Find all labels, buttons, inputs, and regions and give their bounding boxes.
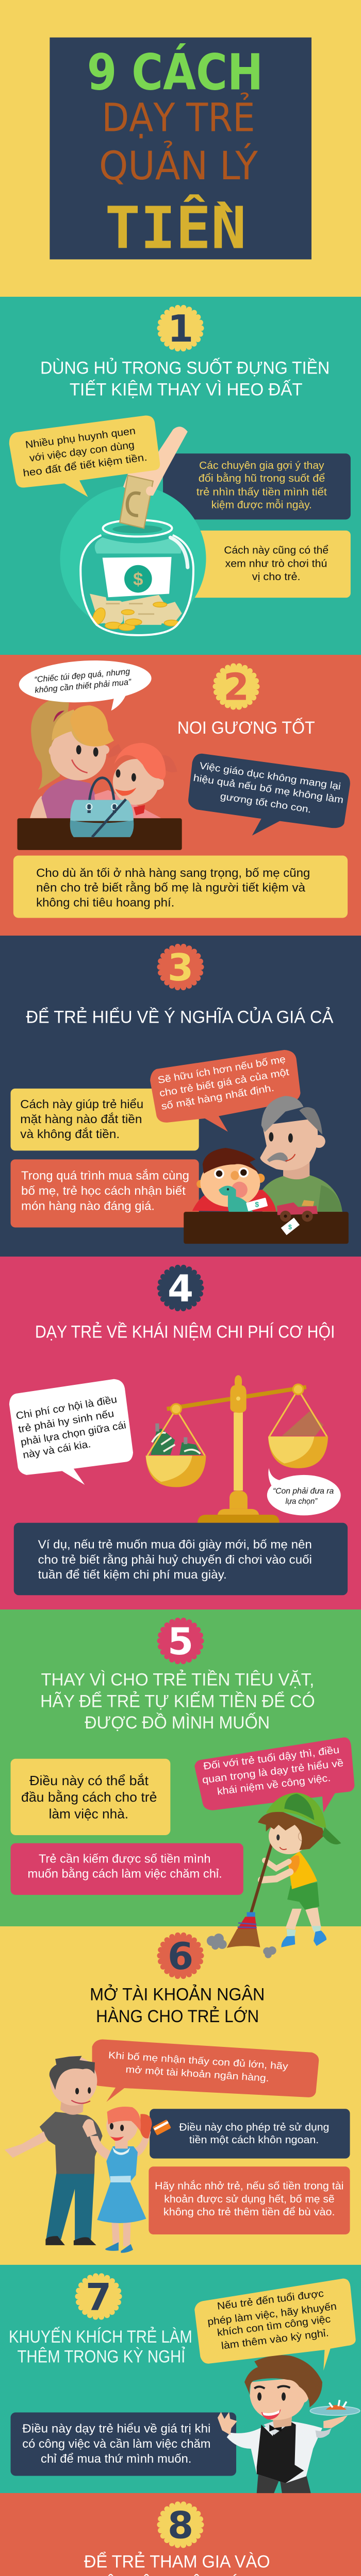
speech bubble: teens and work: Đối với trẻ tuổi dậy thì, điều [203,1744,340,1772]
number badge 2: 2 [223,666,249,709]
speech bubble: make a choice [267,1468,341,1515]
panel: work hard [11,1843,243,1895]
number badge 6: 6 [168,1935,193,1978]
heading 3: ĐỂ TRẺ HIỂU VỀ Ý NGHĨA CỦA GIÁ CẢ [26,1008,334,1027]
panel: housework: Điều này có thể bắt [29,1773,149,1788]
speech bubble: open account: Khi bố mẹ nhận thấy con đủ lớn, hãy [108,2049,289,2072]
number badge 7: 7 [86,2275,111,2318]
title line: dạy trẻ: DẠY TRẺ [102,92,255,141]
speech bubble: opportunity cost definition: này và cái kia. [22,1438,92,1461]
speech bubble: good example [188,754,350,836]
speech bubble: opportunity cost definition [9,1379,133,1485]
speech bubble: knowing prices: số mặt hàng nhất định. [160,1083,275,1112]
heading 6: MỞ TÀI KHOẢN NGÂN [90,1985,265,2004]
panel: shopping with parents [11,1159,199,1227]
illustration: waiter with tray [218,2355,360,2493]
illustration: grandfather and boy with toys: $ [288,1224,292,1231]
speech bubble: holiday job: khích con tìm công việc [217,2313,331,2338]
speech bubble: holiday job [194,2279,356,2370]
section 7 [9,2275,360,2493]
panel: work hard: Trẻ cần kiếm được số tiền mình [39,1852,210,1866]
panel: fun game [184,531,351,598]
panel: expensive items: và không đắt tiền. [20,1127,120,1141]
speech bubble: good example: Việc giáo dục không mang lại [199,760,341,792]
speech bubble: holiday job: Nếu trẻ đến tuổi được [217,2288,324,2312]
icon: jar with money [60,486,206,635]
panel: value of work [11,2412,236,2476]
speech bubble: teens and work: khái niệm về công việc. [217,1772,331,1798]
panel: housework [11,1759,170,1835]
speech bubble: opportunity cost definition: phải lựa chọn giữa cái [20,1419,127,1448]
section 6 [5,1935,350,2253]
panel: thrifty parents: Cho dù ăn tối ở nhà hàng sang trọng, bố mẹ cũng [36,866,310,879]
section 5 [11,1620,354,1958]
number badge 3: 3 [168,946,193,989]
heading 2: NOI GƯƠNG TỐT [177,718,315,738]
speech bubble: open account: mở một tài khoản ngân hàng. [125,2064,269,2083]
heading 1 [40,358,330,399]
illustration: boy sweeping [207,1792,341,1958]
speech bubble: mother's quote: “Chiếc túi đẹp quá, nhưng [34,667,130,684]
illustration: grandfather and boy with toys [184,1096,349,1244]
speech bubble: good example: gương tốt cho con. [220,790,312,815]
panel: value of work: có công việc và cần làm việc chăm [22,2437,210,2450]
panel: wise spending: tiền một cách khôn ngoan. [189,2134,319,2146]
speech bubble: make a choice: “Con phải đưa ra [273,1486,334,1496]
number badge 8: 8 [168,2504,193,2547]
heading 7 [9,2327,192,2367]
heading 7: THÊM TRONG KỲ NGHỈ [17,2347,185,2367]
panel: fun game: vị cho trẻ. [252,571,301,583]
section 8 [11,2504,350,2576]
heading 7: KHUYẾN KHÍCH TRẺ LÀM [9,2327,192,2347]
heading 8: ĐỂ TRẺ THAM GIA VÀO [84,2551,270,2571]
speech bubble: good example: hiệu quả nếu bố mẹ không làm [192,772,344,805]
illustration: grandfather and boy with toys: $ [255,1201,259,1209]
panel: no top-ups: khoản được sử dụng hết, bố mẹ sẽ [164,2193,335,2205]
speech bubble: opportunity cost definition: trẻ phải hy sinh nếu [18,1408,115,1435]
panel: experts suggest [163,453,351,519]
panel: no top-ups: không cho trẻ thêm tiền để bù vào. [163,2206,335,2218]
number badge 1: 1 [168,307,193,350]
number badge 2 [216,666,257,709]
number badge 1 [160,307,201,350]
heading 5 [40,1670,315,1733]
panel: experts suggest: trẻ nhìn thấy tiền mình tiết [196,486,327,498]
heading 6: HÀNG CHO TRẺ LỚN [96,2007,259,2026]
illustration: father and daughter with card [5,2056,171,2253]
section 2 [13,657,350,918]
section 3 [11,946,349,1244]
heading 1: DÙNG HỦ TRONG SUỐT ĐỰNG TIỀN [40,358,330,378]
section 1 [9,307,351,635]
panel: housework: làm việc nhà. [49,1807,128,1821]
speech bubble: holiday job: làm thêm vào kỳ nghỉ. [221,2327,330,2352]
title line: quản lý: QUẢN LÝ [99,140,258,189]
panel: thrifty parents [13,856,348,918]
panel: experts suggest: Các chuyên gia gợi ý thay [199,460,324,471]
illustration: balance scale [146,1375,328,1523]
panel: value of work: chỉ để mua thứ mình muốn. [41,2452,191,2465]
title line: 9 cách: 9 CÁCH [87,43,263,101]
heading 6 [90,1985,265,2026]
heading 8 [84,2551,270,2576]
heading 5: ĐƯỢC ĐỒ MÌNH MUỐN [85,1713,270,1733]
number badge 8 [160,2504,201,2547]
icon: jar with money: $ [133,569,143,589]
title panel [50,38,311,262]
panel: housework: đầu bằng cách cho trẻ [21,1790,157,1805]
panel: thrifty parents: không chi tiêu hoang phí. [36,896,174,909]
panel: thrifty parents: nên cho trẻ biết rằng bố mẹ là người tiết kiệm và [36,881,305,894]
panel: shopping with parents: Trong quá trình mua sắm cùng [21,1169,189,1182]
panel: example of shoes: Ví dụ, nếu trẻ muốn mua đôi giày mới, bố mẹ nên [38,1538,312,1551]
speech bubble: knowing prices: Sẽ hữu ích hơn nếu bố mẹ [157,1054,286,1086]
panel: fun game: xem như trò chơi thú [225,557,327,569]
heading 1: TIẾT KIỆM THAY VÌ HEO ĐẤT [70,380,303,399]
number badge 4: 4 [168,1267,193,1310]
speech bubble: piggy bank habit: Nhiều phụ huynh quen [25,425,136,451]
panel: work hard: muốn bằng cách làm việc chăm chỉ. [28,1867,222,1880]
heading 5: THAY VÌ CHO TRẺ TIỀN TIÊU VẶT, [41,1670,314,1689]
speech bubble: knowing prices: cho trẻ biết giá cả của một [159,1067,290,1099]
speech bubble: teens and work [194,1737,354,1812]
speech bubble: piggy bank habit: với việc dạy con dùng [29,439,135,464]
heading 5: HÃY ĐỂ TRẺ TỰ KIẾM TIỀN ĐỂ CÓ [40,1691,315,1711]
icon: hand with banknote [120,427,188,528]
panel: shopping with parents: món hàng nào đáng giá. [21,1199,155,1213]
panel: shopping with parents: bố mẹ, trẻ học cách nhận biết [21,1184,186,1197]
panel: fun game: Cách này cũng có thể [224,544,329,556]
panel: example of shoes: tuần để tiết kiệm chi phí mua giày. [38,1568,227,1581]
panel: experts suggest: đổi bằng hũ trong suốt để [199,472,325,484]
number badge 5: 5 [168,1620,193,1663]
speech bubble: piggy bank habit [9,416,160,497]
speech bubble: holiday job: phép làm việc, hãy khuyến [207,2301,337,2328]
speech bubble: mother's quote [18,657,153,710]
panel: wise spending [150,2109,350,2159]
panel: value of work: Điều này dạy trẻ hiểu về giá trị khi [22,2422,210,2435]
panel: expensive items [11,1089,199,1150]
panel: no top-ups: Hãy nhắc nhở trẻ, nếu số tiền trong tài [155,2180,343,2192]
heading 4: DẠY TRẺ VỀ KHÁI NIỆM CHI PHÍ CƠ HỘI [35,1322,335,1342]
number badge 5 [160,1620,201,1663]
speech bubble: teens and work: quan trọng là dạy trẻ hiểu về [202,1757,344,1786]
illustration: mother and daughter with bag [17,700,182,850]
panel: expensive items: Cách này giúp trẻ hiểu [20,1097,143,1111]
number badge 4 [160,1267,201,1310]
title line: tiền: TIỀN [105,194,247,262]
speech bubble: piggy bank habit: heo đất để tiết kiệm tiền. [22,452,148,479]
speech bubble: opportunity cost definition: Chi phí cơ hội là điều [15,1394,118,1422]
number badge 6 [160,1935,201,1978]
number badge 7 [78,2275,119,2318]
panel: example of shoes [14,1523,348,1595]
speech bubble: make a choice: lựa chọn” [286,1497,318,1506]
panel: no top-ups [149,2166,350,2234]
speech bubble: open account [92,2039,319,2102]
section 4 [9,1267,348,1595]
speech bubble: mother's quote: không cần thiết phải mua” [35,677,132,695]
number badge 3 [160,946,201,989]
panel: wise spending: Điều này cho phép trẻ sử dụng [179,2122,329,2133]
panel: example of shoes: cho trẻ biết rằng phải huỷ chuyến đi chơi vào cuối [38,1553,312,1566]
panel: experts suggest: kiệm được mỗi ngày. [211,499,312,511]
speech bubble: knowing prices [150,1050,301,1132]
panel: expensive items: mặt hàng nào đắt tiền [20,1112,142,1126]
